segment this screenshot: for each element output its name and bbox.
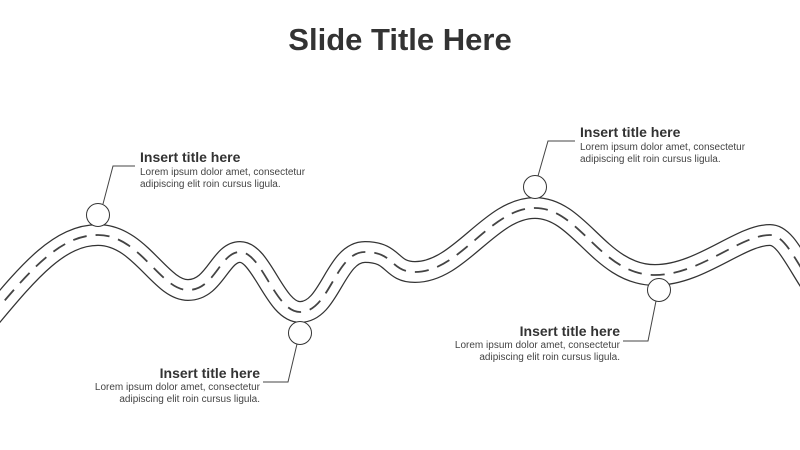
- callout 3: Lorem ipsum dolor amet, consectetur: [580, 142, 745, 153]
- callout 1: [140, 149, 305, 190]
- callout 4: Lorem ipsum dolor amet, consectetur: [455, 340, 620, 351]
- callout 4: Insert title here: [520, 323, 620, 339]
- callout 4: adipiscing elit roin cursus ligula.: [479, 352, 620, 363]
- callout 4: [455, 323, 620, 363]
- callout 2: [95, 365, 260, 405]
- callout 3: [580, 124, 745, 165]
- callout 3: adipiscing elit roin cursus ligula.: [580, 154, 721, 165]
- callout 2: Lorem ipsum dolor amet, consectetur: [95, 382, 260, 393]
- leader lines: [103, 141, 656, 382]
- callout 3: Insert title here: [580, 124, 680, 140]
- road: [0, 208, 800, 318]
- title: Slide Title Here: [288, 22, 512, 57]
- callout 2: adipiscing elit roin cursus ligula.: [119, 394, 260, 405]
- markers: [86, 176, 670, 344]
- callout 1: Lorem ipsum dolor amet, consectetur: [140, 167, 305, 178]
- callout 2: Insert title here: [160, 365, 260, 381]
- callout 1: Insert title here: [140, 149, 240, 165]
- callout 1: adipiscing elit roin cursus ligula.: [140, 179, 281, 190]
